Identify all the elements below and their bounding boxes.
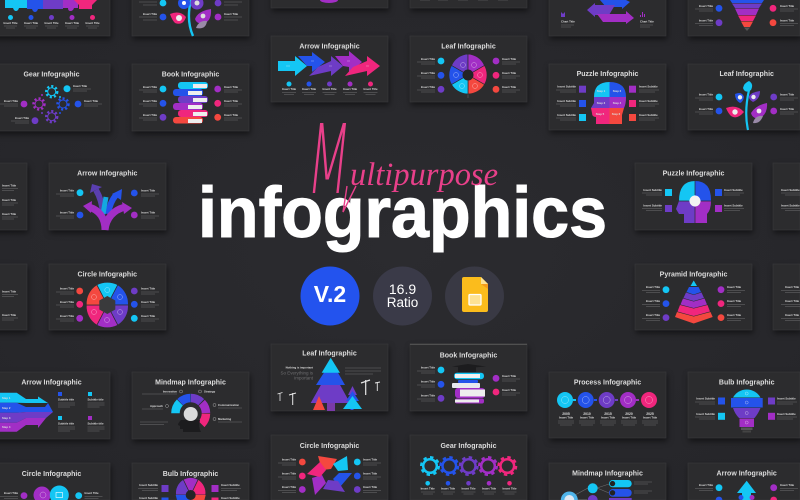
side items: Insert Title xyxy=(141,286,156,290)
mindmap labels xyxy=(140,390,242,424)
subtitle blocks: Subtitle title xyxy=(88,422,104,426)
card: leaf infographic, trees xyxy=(271,344,388,411)
side items: Insert Title xyxy=(143,113,157,117)
step labels: Insert Title xyxy=(502,486,517,490)
mindmap labels: Innovation xyxy=(163,390,177,394)
badge: version xyxy=(300,266,360,326)
side items: Insert Title xyxy=(363,458,378,462)
arrow bands xyxy=(0,393,53,432)
step dots and labels: Insert Title xyxy=(44,21,59,25)
list xyxy=(781,188,800,210)
copy: So Everything is xyxy=(280,370,314,376)
card: pyramid infographic xyxy=(635,264,752,330)
head puzzle: Step 2 xyxy=(613,89,622,93)
side items: Insert Title xyxy=(363,485,378,489)
side items: Insert Subtitle xyxy=(724,188,743,192)
card: book infographic, upper xyxy=(132,64,249,131)
years: 2005 xyxy=(562,412,570,416)
side items xyxy=(695,483,798,500)
card: leaf infographic, upper right xyxy=(688,64,800,130)
side items: Insert Title xyxy=(727,313,742,317)
pills xyxy=(609,480,652,500)
side items: Insert Title xyxy=(727,299,742,303)
years: 2010 xyxy=(583,412,591,416)
card: strip, left upper xyxy=(0,163,27,230)
arrow bands: Step 1 xyxy=(2,396,11,400)
step dots and labels xyxy=(3,15,100,28)
side items xyxy=(278,458,381,493)
side items xyxy=(56,188,159,218)
list: Insert Title xyxy=(2,184,17,188)
script heading: Multipurpose: ultipurpose xyxy=(350,157,498,193)
step labels: Insert Title xyxy=(363,87,378,91)
side items: Chart Title xyxy=(561,20,575,24)
list xyxy=(781,285,800,320)
subtitle blocks xyxy=(58,392,104,431)
side items: Insert Title xyxy=(282,485,296,489)
plant xyxy=(726,81,767,130)
step labels: Insert Title xyxy=(461,486,476,490)
side items: Insert Title xyxy=(646,299,660,303)
side items: Insert Subtitle xyxy=(777,396,796,400)
card: opposing arrows, top xyxy=(549,0,666,36)
head puzzle: Step 4 xyxy=(613,101,622,105)
step dots and labels: Insert Title xyxy=(24,21,38,25)
list: Insert Subtitle xyxy=(781,188,800,192)
inverted pyramid xyxy=(730,0,764,31)
trees xyxy=(311,358,362,411)
copy xyxy=(280,366,381,380)
hexagon ring xyxy=(86,282,128,328)
side items: Insert Title xyxy=(84,99,99,103)
head puzzle: Step 5 xyxy=(596,112,605,116)
side items: Insert Title xyxy=(60,300,74,304)
gears xyxy=(34,86,68,122)
step dots and labels: Insert Title xyxy=(3,21,18,25)
title: Leaf Infographic xyxy=(302,350,357,358)
head puzzle: Step 6 xyxy=(612,112,621,116)
list: Insert Title xyxy=(785,313,800,317)
copy: Nothing is important xyxy=(286,366,313,370)
main heading: infographics: infographics xyxy=(198,174,607,253)
brain xyxy=(184,407,198,421)
side items: Insert Subtitle xyxy=(557,84,576,88)
puzzle pieces xyxy=(5,0,97,12)
book stack xyxy=(173,82,208,124)
card: puzzle infographic, right xyxy=(635,163,752,230)
step dots and labels: Insert Title xyxy=(65,21,79,25)
card: strip, right lower xyxy=(773,264,800,330)
head puzzle xyxy=(591,82,626,124)
side items: Insert Title xyxy=(363,472,378,476)
mindmap labels: Communication xyxy=(218,403,239,407)
title: Arrow Infographic xyxy=(21,380,82,386)
side items: Insert Title xyxy=(646,285,660,289)
side items: Insert Subtitle xyxy=(643,188,662,192)
side items: Insert Subtitle xyxy=(639,84,658,88)
step labels: Insert Title xyxy=(322,87,337,91)
step labels xyxy=(421,481,517,494)
card: fragment, top centre xyxy=(271,0,388,8)
side items: Insert Title xyxy=(502,388,517,392)
side items: Insert Subtitle xyxy=(139,496,158,500)
side items: Insert Subtitle xyxy=(557,99,576,103)
side items xyxy=(642,188,744,212)
side items: Insert Title xyxy=(502,57,517,61)
step labels: Insert Title xyxy=(482,486,496,490)
badge: ratio: Ratio xyxy=(387,295,418,310)
side items: Insert Subtitle xyxy=(639,113,658,117)
card: puzzle infographic, upper xyxy=(549,64,666,130)
overlapping circles xyxy=(34,486,69,500)
head puzzle: Step 3 xyxy=(597,101,606,105)
side items xyxy=(556,84,659,121)
title: Bulb Infographic xyxy=(163,471,218,478)
arrow bands: Step 4 xyxy=(2,425,11,429)
title: Mindmap Infographic xyxy=(155,380,226,386)
side items xyxy=(695,4,798,26)
step labels: Insert Title xyxy=(282,87,296,91)
badge: google slides icon xyxy=(445,266,504,326)
card: process infographic xyxy=(549,372,666,438)
card: forking arrows xyxy=(49,163,166,230)
head silhouette xyxy=(178,420,201,432)
side items: Insert Title xyxy=(421,71,435,75)
gear hubs xyxy=(423,459,514,473)
process nodes xyxy=(557,392,657,408)
side items: Insert Title xyxy=(699,18,713,22)
mindmap labels: Marketing xyxy=(218,417,232,421)
pyramid xyxy=(675,280,713,324)
arrows xyxy=(587,0,634,24)
descriptions: Insert Title xyxy=(601,416,615,420)
side items: Insert Title xyxy=(73,84,88,88)
plant diagram xyxy=(170,0,211,36)
years: 2015 xyxy=(604,412,612,416)
chevron arrows xyxy=(278,51,380,76)
years: 2025 xyxy=(646,412,654,416)
side items: Insert Title xyxy=(421,85,435,89)
wind turbines xyxy=(278,380,380,405)
side items: Insert Title xyxy=(780,18,795,22)
descriptions: Insert Title xyxy=(580,416,594,420)
years: 2020 xyxy=(625,412,633,416)
leaf wheel xyxy=(449,54,487,98)
side items: Insert Title xyxy=(502,85,517,89)
side items xyxy=(642,285,745,321)
mindmap labels: Strategy xyxy=(204,390,216,394)
side items xyxy=(561,12,654,27)
list: Insert Title xyxy=(2,212,17,216)
side items: Insert Title xyxy=(699,107,713,111)
side items: Insert Subtitle xyxy=(724,204,743,208)
step dots and labels: Insert Title xyxy=(85,21,100,25)
side items: Insert Title xyxy=(15,116,29,120)
side items: Insert Subtitle xyxy=(139,483,158,487)
side items xyxy=(138,483,241,500)
title: Leaf Infographic xyxy=(719,71,774,78)
step labels xyxy=(282,82,378,94)
step labels: Insert Title xyxy=(302,87,316,91)
list: Insert Title xyxy=(2,198,17,202)
side items: Insert Title xyxy=(727,285,742,289)
card: book infographic, centre xyxy=(410,344,527,411)
step labels: Insert Title xyxy=(343,87,357,91)
side items: Insert Title xyxy=(282,472,296,476)
list: Insert Title xyxy=(2,290,17,294)
list: Insert Title xyxy=(785,285,800,289)
subtitle blocks: Subtitle title xyxy=(58,398,74,402)
segmented arc and brain xyxy=(175,398,206,424)
side items: Insert Title xyxy=(502,374,517,378)
card: mindmap infographic xyxy=(132,372,249,439)
graduation cap and books xyxy=(452,364,486,404)
up arrow xyxy=(737,481,756,500)
title: Arrow Infographic xyxy=(717,470,777,478)
side items xyxy=(0,491,102,499)
card: gear infographic, left xyxy=(0,64,110,131)
side items: Insert Title xyxy=(421,366,435,370)
side items: Insert Title xyxy=(143,99,157,103)
bulb xyxy=(731,389,763,432)
head puzzle xyxy=(676,181,711,223)
side items: Insert Title xyxy=(699,483,713,487)
side items: Insert Title xyxy=(421,57,435,61)
side items: Insert Subtitle xyxy=(696,412,715,416)
side items xyxy=(139,85,242,121)
side items: Insert Title xyxy=(780,4,795,8)
title: Puzzle Infographic xyxy=(663,170,725,178)
side items: Insert Title xyxy=(4,99,18,103)
side items: Insert Title xyxy=(143,85,157,89)
step labels: Insert Title xyxy=(421,486,435,490)
card: bulb infographic, lower xyxy=(132,463,249,500)
card: arrow infographic, lower right xyxy=(688,463,800,500)
badge: ratio: 16.9 xyxy=(389,281,416,297)
star blades xyxy=(307,456,352,495)
gears xyxy=(422,458,516,474)
side items: Insert Title xyxy=(60,210,74,214)
side items: Insert Title xyxy=(141,314,156,318)
descriptions: Insert Title xyxy=(643,416,657,420)
side items: Insert Subtitle xyxy=(557,113,576,117)
badge: version: V.2 xyxy=(314,281,346,307)
card: leaf infographic xyxy=(410,36,527,102)
badge: ratio xyxy=(373,266,432,326)
card: fragment, top middle xyxy=(410,0,527,8)
side items: Insert Subtitle xyxy=(639,99,658,103)
subtitle blocks: Subtitle title xyxy=(58,422,74,426)
side items: Insert Subtitle xyxy=(221,483,240,487)
arrow bands: Step 2 xyxy=(2,406,11,410)
card: circle infographic xyxy=(49,264,166,330)
script heading: Multipurpose xyxy=(303,104,498,216)
forking arrows xyxy=(83,184,132,230)
mindmap labels: Approach xyxy=(150,404,163,408)
title: Puzzle Infographic xyxy=(577,71,639,78)
card: strip, left lower xyxy=(0,264,27,330)
side items: Chart Title xyxy=(640,20,654,24)
side items: Insert Title xyxy=(780,107,795,111)
side items xyxy=(417,57,520,93)
list xyxy=(2,290,18,320)
title: Gear Infographic xyxy=(23,72,80,78)
arrow bands: Step 3 xyxy=(2,416,11,420)
years xyxy=(562,412,654,416)
card: gear infographic, centre xyxy=(410,435,527,500)
title: Circle Infographic xyxy=(22,471,81,478)
title: Circle Infographic xyxy=(300,443,359,450)
side items: Insert Title xyxy=(421,394,435,398)
list: Insert Subtitle xyxy=(781,204,800,208)
title: Bulb Infographic xyxy=(719,380,775,386)
card: mindmap infographic, lower right xyxy=(549,463,666,500)
side items: Insert Title xyxy=(780,92,795,96)
mindmap nodes xyxy=(561,483,609,500)
side items: Insert Title xyxy=(282,458,296,462)
side items: Insert Title xyxy=(84,491,99,495)
bulb wheel xyxy=(176,478,206,500)
descriptions: Insert Title xyxy=(559,416,573,420)
card: circle infographic, lower left xyxy=(0,463,110,500)
descriptions xyxy=(558,416,658,425)
title: Circle Infographic xyxy=(78,272,137,278)
copy: important xyxy=(294,376,314,380)
side items: Insert Subtitle xyxy=(221,496,240,500)
side items xyxy=(0,84,102,124)
card: bulb infographic xyxy=(688,372,800,438)
card: strip, right upper xyxy=(773,163,800,230)
side items xyxy=(139,0,242,20)
side items xyxy=(695,92,798,114)
title: Mindmap Infographic xyxy=(572,470,643,478)
side items: Insert Title xyxy=(141,210,156,214)
head puzzle: Step 1 xyxy=(597,89,606,93)
side items: Insert Title xyxy=(699,4,713,8)
script heading: Multipurpose: M xyxy=(303,104,356,216)
card: inverted pyramid, top right xyxy=(688,0,800,36)
side items: Insert Title xyxy=(141,300,156,304)
side items: Insert Title xyxy=(421,380,435,384)
title: Leaf Infographic xyxy=(441,44,496,50)
card: puzzle strip, top left xyxy=(0,0,110,36)
side items: Insert Title xyxy=(60,188,74,192)
side items: Insert Title xyxy=(224,85,239,89)
side items: Insert Title xyxy=(502,71,517,75)
card: arrow infographic, lower left xyxy=(0,372,110,439)
side items: Insert Title xyxy=(224,99,239,103)
descriptions: Insert Title xyxy=(622,416,636,420)
side items: Insert Subtitle xyxy=(643,204,662,208)
card: arrow infographic xyxy=(271,36,388,102)
card: circle infographic, star xyxy=(271,435,388,500)
side items xyxy=(417,366,520,402)
side items: Insert Subtitle xyxy=(696,396,715,400)
list: Insert Title xyxy=(785,299,800,303)
subtitle blocks: Subtitle title xyxy=(88,398,104,402)
side items: Insert Title xyxy=(224,12,239,16)
step labels: Insert Title xyxy=(441,486,455,490)
side items: Insert Title xyxy=(224,113,239,117)
side items: Insert Title xyxy=(699,92,713,96)
title: Pyramid Infographic xyxy=(660,272,727,278)
side items xyxy=(695,396,797,420)
side items xyxy=(56,286,159,322)
side items: Insert Title xyxy=(780,483,795,487)
side items: Insert Title xyxy=(60,314,74,318)
side items: Insert Title xyxy=(4,491,18,495)
side items: Insert Title xyxy=(60,286,74,290)
title: Arrow Infographic xyxy=(77,170,138,178)
title: Process Infographic xyxy=(574,380,641,386)
list: Insert Title xyxy=(2,313,17,317)
title: Arrow Infographic xyxy=(299,44,360,50)
side items: Insert Title xyxy=(143,12,157,16)
side items: Insert Subtitle xyxy=(777,412,796,416)
title: Book Infographic xyxy=(162,72,219,78)
title: Gear Infographic xyxy=(440,443,497,450)
list xyxy=(2,184,18,219)
title: Book Infographic xyxy=(440,352,497,360)
side items: Insert Title xyxy=(141,188,156,192)
side items: Insert Title xyxy=(646,313,660,317)
card: plant, top xyxy=(132,0,249,36)
